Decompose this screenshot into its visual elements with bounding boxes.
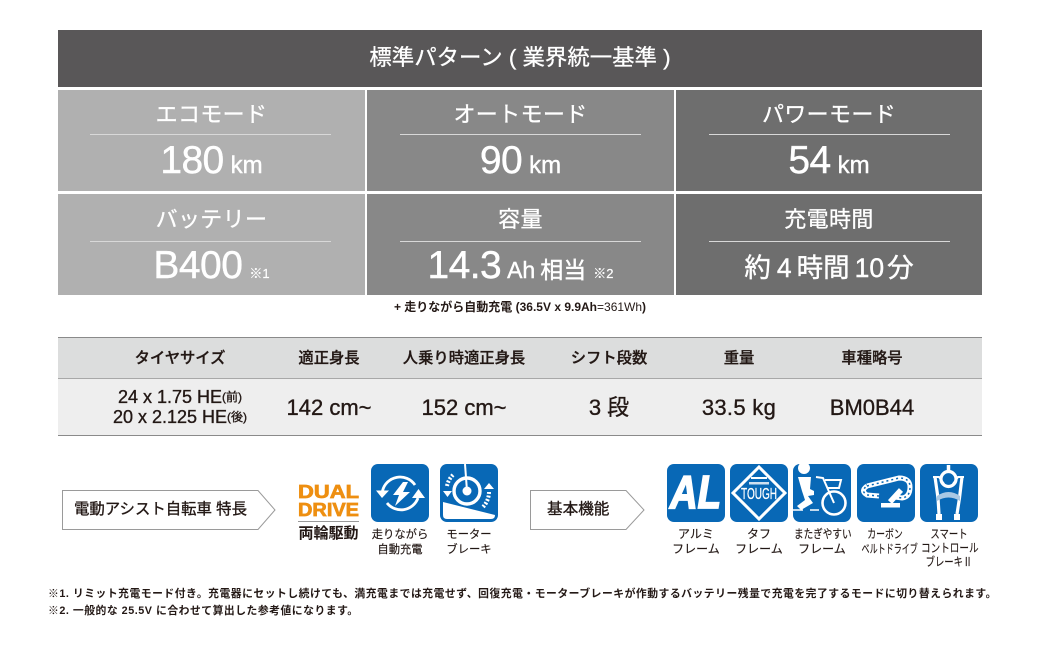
spec heading: tire size: タイヤサイズ [135,350,225,367]
panel: spec table [58,337,982,436]
spec heading: height: 適正身長 [298,350,360,367]
arrow label: assist features: 電動アシスト自転車 特長 [74,501,247,518]
heading: standard pattern [58,30,982,87]
caption: step-through frame [794,527,852,556]
caption: tough frame: タフ [747,527,771,541]
icon: step-through frame [793,464,851,522]
panel: charge time [676,194,982,295]
logo: dual drive [298,482,359,542]
caption: smart control brake: ブレーキⅡ [926,555,972,569]
spec heading: riding height: 人乗り時適正身長 [403,350,525,367]
caption: motor brake [446,528,492,556]
arrow label: basic functions [530,490,644,530]
panel: battery [58,194,365,295]
spec heading: shift: シフト段数 [571,350,647,367]
caption: tough frame: フレーム [735,542,783,556]
spec value: tire size: 20 x 2.125 HE(後) [113,407,247,427]
power value: 54 km [788,139,870,182]
charge time value: 約4時間10分 [744,253,914,283]
spec value: weight: 33.5 kg [702,395,776,420]
spec heading: weight: 重量 [724,350,754,367]
auto value: 90 km [480,139,561,182]
arrow label: basic functions: 基本機能 [547,501,609,518]
footnotes [48,587,997,617]
caption: aluminium frame: フレーム [672,542,720,556]
spec value: shift: 3 段 [589,395,629,420]
caption: regenerative charging: 走りながら [372,529,428,541]
spec heading: model: 車種略号 [841,350,903,367]
icon: motor brake [440,464,498,522]
caption: smart control brake: コントロール [921,541,979,555]
panel: power mode [676,90,982,191]
caption: regenerative charging: 自動充電 [377,544,423,556]
caption: smart control brake [921,527,979,569]
caption: tough frame [735,527,783,556]
logo: dual drive: DUAL [298,482,359,502]
arrow label: assist features [62,490,276,530]
caption: carbon belt drive: カーボン [867,527,903,541]
charge time label: 充電時間 [784,207,874,232]
footnotes: ※1. リミット充電モード付き。充電器にセットし続けても、満充電までは充電せず、回復充電・モーターブレーキが作動するバッテリー残量で充電を完了するモードに切り替えられます。 [48,588,997,600]
eco value: 180 km [160,139,263,182]
caption: motor brake: モーター [446,529,492,541]
battery value: B400 ※1 [153,244,270,287]
caption: carbon belt drive: ベルトドライブ [862,542,918,556]
icon: regenerative charging [371,464,429,522]
spec value: riding height: 152 cm~ [422,395,506,420]
capacity label: 容量 [498,207,543,232]
power label: パワーモード [762,102,896,127]
caption: step-through frame: またぎやすい [794,527,852,541]
panel: capacity [367,194,674,295]
caption: smart control brake: スマート [930,527,968,541]
panel: eco mode [58,90,365,191]
caption: aluminium frame [672,527,720,556]
spec value: height: 142 cm~ [286,395,372,420]
spec value: tire size [113,387,247,427]
icon: tough frame [730,464,788,522]
caption: step-through frame: フレーム [798,542,846,556]
capacity value: 14.3 Ah相当 ※2 [428,244,613,287]
caption: motor brake: ブレーキ [446,544,492,556]
note: regenerative charging: + 走りながら自動充電 (36.5V x 9.9Ah=361Wh) [394,300,646,314]
icon: smart control brake [920,464,978,522]
auto label: オートモード [453,102,588,127]
caption: carbon belt drive [862,527,918,556]
spec value: model: BM0B44 [830,395,914,420]
caption: aluminium frame: アルミ [678,527,714,541]
panel: range and battery table [58,30,982,295]
battery label: バッテリー [156,207,267,232]
footnotes: ※2. 一般的な 25.5V に合わせて算出した参考値になります。 [48,605,359,617]
panel: auto mode [367,90,674,191]
eco label: エコモード [156,102,267,127]
heading: standard pattern: 標準パターン ( 業界統一基準 ) [369,45,671,70]
logo: dual drive: DRIVE [298,500,359,520]
logo: dual drive: 両輪駆動 [298,525,358,542]
spec value: tire size: 24 x 1.75 HE(前) [118,387,242,407]
icon: carbon belt drive [857,464,915,522]
caption: regenerative charging [372,528,428,556]
